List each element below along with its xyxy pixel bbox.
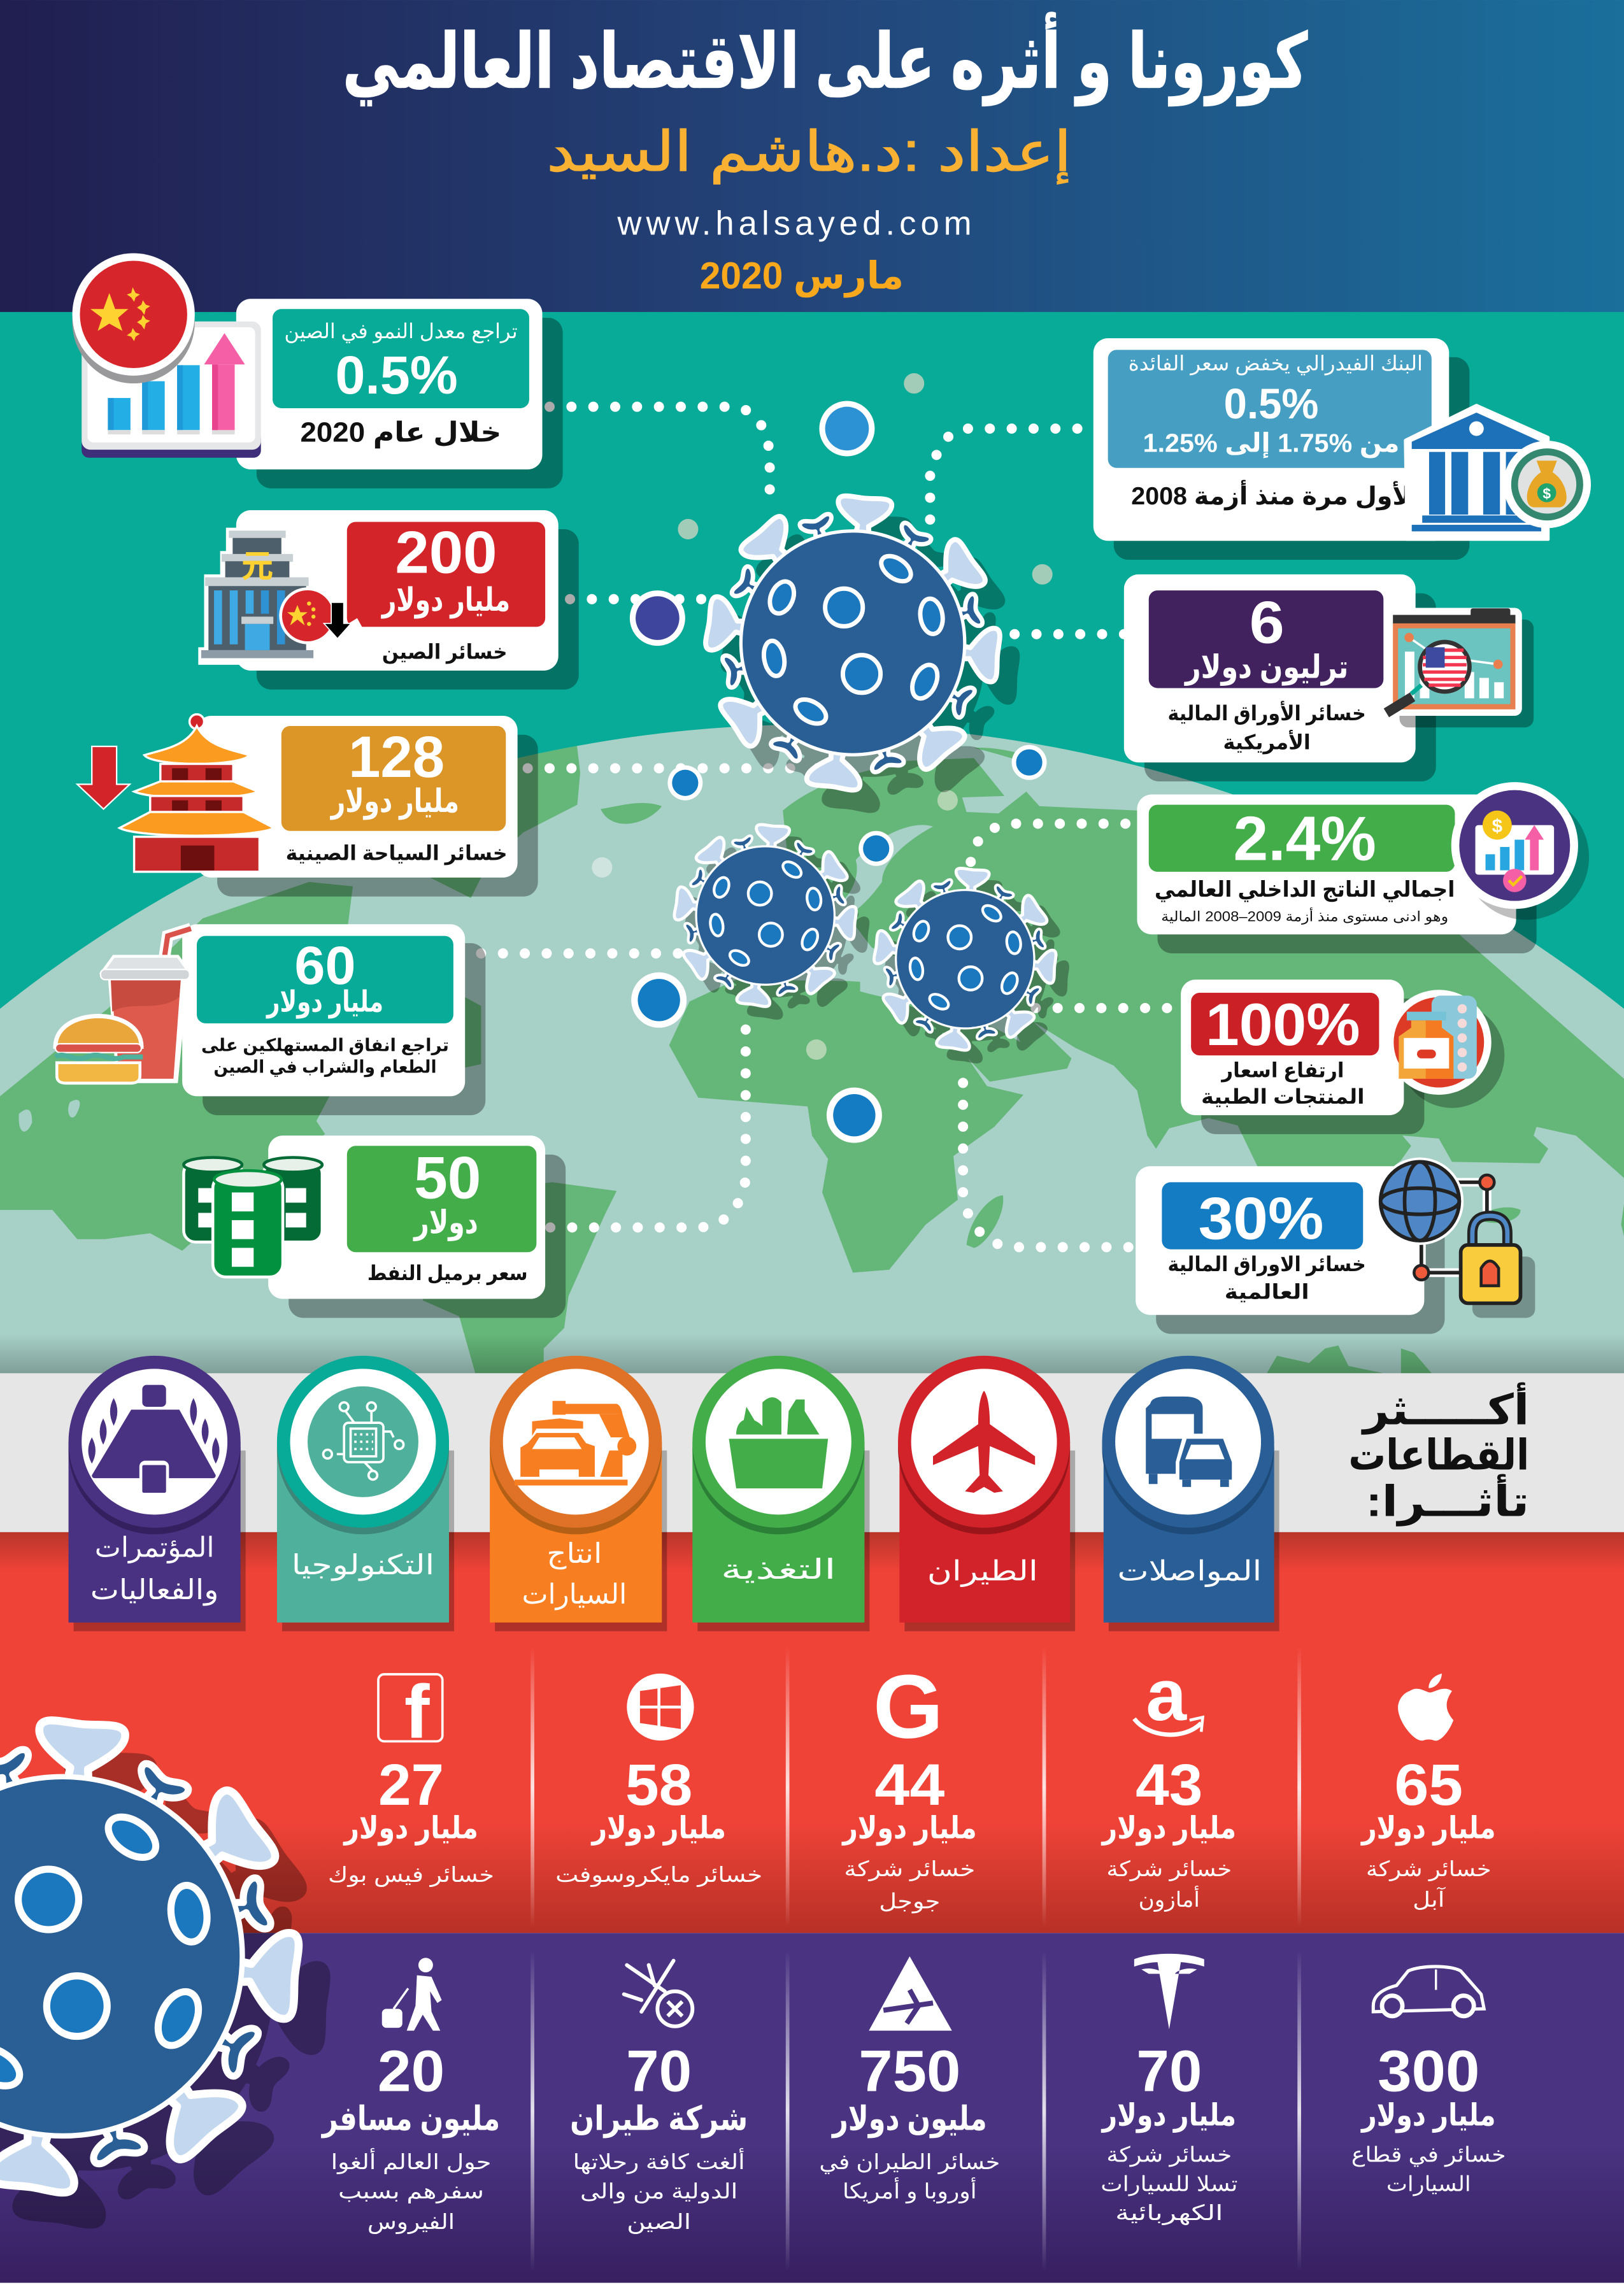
stat: Microsoft: 58 bbox=[625, 1753, 692, 1818]
icon: airplane bbox=[933, 1391, 1035, 1493]
tab: car manufacturing: السيارات bbox=[522, 1579, 627, 1611]
stat: aviation losses: مليون دولار bbox=[831, 2100, 987, 2138]
stat: Amazon: خسائر شركة bbox=[1106, 1858, 1232, 1881]
map node markers bbox=[630, 401, 1047, 1143]
panel: China growth: 0.5% bbox=[335, 345, 458, 405]
icon: analytics with US flag magnifier bbox=[1386, 608, 1534, 727]
panel: food spending 60: 60 bbox=[294, 935, 356, 995]
panel: medical prices 100%: ارتفاع اسعار bbox=[1220, 1059, 1344, 1083]
panel: China growth bbox=[236, 299, 563, 488]
header band bbox=[0, 0, 1624, 313]
panel: China losses 200: خسائر الصين bbox=[382, 641, 508, 664]
stat: Google bbox=[841, 1657, 977, 1913]
tab: aviation bbox=[898, 1356, 1075, 1631]
tab: aviation: الطيران bbox=[927, 1556, 1038, 1587]
panel: global securities 30%: العالمية bbox=[1225, 1281, 1309, 1304]
tab: conferences: المؤتمرات bbox=[95, 1533, 214, 1564]
icon: China chart bbox=[73, 253, 261, 458]
icon: windows bbox=[627, 1674, 694, 1740]
icon: tesla bbox=[1134, 1954, 1204, 2029]
stat: airlines: ألغت كافة رحلاتها bbox=[573, 2148, 745, 2174]
tab: conferences bbox=[69, 1356, 246, 1631]
tab: food: التغذية bbox=[721, 1555, 836, 1585]
icon: car robot bbox=[515, 1401, 636, 1486]
decorative pale dots bbox=[592, 373, 1053, 1060]
stat: airlines: الدولية من والى bbox=[580, 2180, 737, 2204]
stat: Amazon: مليار دولار bbox=[1101, 1811, 1236, 1846]
stat: Microsoft bbox=[555, 1674, 762, 1887]
panel: global GDP 2.4%: اجمالي الناتج الداخلي العالمي bbox=[1155, 878, 1455, 902]
panel: tourism 128: 128 bbox=[348, 725, 445, 790]
panel: oil price 50: سعر برميل النفط bbox=[367, 1262, 528, 1285]
panel: Federal Reserve bbox=[1093, 338, 1469, 560]
column dividers bbox=[531, 1648, 1301, 2271]
icon: apple bbox=[1398, 1674, 1453, 1740]
panel: Federal Reserve: لأول مرة منذ أزمة 2008 bbox=[1131, 480, 1411, 511]
stat: Facebook: 27 bbox=[378, 1753, 444, 1818]
stat: aviation losses: خسائر الطيران في bbox=[819, 2151, 1000, 2174]
panel: global GDP 2.4%: وهو ادنى مستوى منذ أزمة 2009–2008 المالية bbox=[1161, 908, 1448, 925]
tab: car manufacturing bbox=[490, 1356, 667, 1631]
panel: China losses 200: 200 bbox=[395, 519, 497, 586]
icon: facebook: f bbox=[404, 1670, 430, 1755]
icon: globe and lock bbox=[1376, 1158, 1535, 1318]
connector dotted lines bbox=[481, 407, 1167, 1247]
bottom white strip bbox=[0, 2283, 1624, 2285]
panel: oil price 50: دولار bbox=[413, 1204, 478, 1242]
stat: airlines: الصين bbox=[627, 2210, 691, 2235]
stat: Amazon: 43 bbox=[1136, 1753, 1202, 1818]
stat: passengers: الفيروس bbox=[367, 2210, 455, 2234]
panel: China growth: خلال عام 2020 bbox=[301, 418, 501, 448]
panel: China growth: تراجع معدل النمو في الصين bbox=[284, 320, 518, 343]
tab: conferences: والفعاليات bbox=[90, 1575, 218, 1606]
author: إعداد :د.هاشم السيد bbox=[546, 121, 1071, 185]
stat: Tesla: تسلا للسيارات bbox=[1100, 2172, 1237, 2196]
panel: global GDP 2.4%: 2.4% bbox=[1234, 804, 1376, 874]
icon: food basket bbox=[729, 1397, 828, 1488]
stat: Tesla: مليار دولار bbox=[1101, 2098, 1236, 2133]
stat: Facebook: خسائر فيس بوك bbox=[328, 1863, 494, 1887]
stat: Facebook: مليار دولار bbox=[343, 1811, 478, 1846]
panel: oil price 50: 50 bbox=[414, 1144, 481, 1211]
icon: bus and car bbox=[1146, 1397, 1202, 1484]
panel: Federal Reserve: من ‎1.75%‎ إلى ‎1.25%‎ bbox=[1143, 429, 1399, 459]
red losses band bbox=[0, 1532, 1624, 1933]
panel: oil price 50 bbox=[268, 1135, 566, 1318]
stat: Tesla: الكهربائية bbox=[1115, 2202, 1223, 2225]
title: كورونا و أثره على الاقتصاد العالمي bbox=[343, 11, 1308, 106]
stat: passengers: 20 bbox=[378, 2039, 445, 2104]
stat: Google: مليار دولار bbox=[841, 1811, 977, 1846]
stat: aviation losses: أوروبا و أمريكا bbox=[843, 2177, 977, 2203]
icon: bank and money bag bbox=[1406, 405, 1591, 539]
panel: food spending 60: مليار دولار bbox=[266, 986, 383, 1019]
icon: GDP chart circle bbox=[1451, 782, 1589, 920]
date: مارس 2020 bbox=[700, 254, 904, 298]
icon: amazon bbox=[1134, 1655, 1202, 1736]
grey sector band bbox=[0, 1373, 1624, 1532]
stat: Amazon: أمازون bbox=[1139, 1886, 1200, 1912]
stat: Microsoft: مليار دولار bbox=[591, 1811, 726, 1846]
icon: facebook bbox=[378, 1670, 443, 1755]
teal background bbox=[0, 312, 1624, 1376]
icon: traveller bbox=[382, 1958, 442, 2031]
stat: Apple bbox=[1360, 1674, 1496, 1912]
stat: Google: خسائر شركة bbox=[844, 1858, 975, 1881]
panel: tourism 128 bbox=[197, 716, 538, 897]
tab: transport: المواصلات bbox=[1118, 1556, 1262, 1587]
panel: medical prices 100% bbox=[1181, 979, 1424, 1134]
panel: Federal Reserve: 0.5% bbox=[1224, 381, 1318, 428]
stat: airlines bbox=[570, 1961, 748, 2235]
icon: vintage car bbox=[1373, 1967, 1484, 2016]
panel: global GDP 2.4% bbox=[1137, 795, 1537, 953]
panel: China losses 200: مليار دولار bbox=[380, 581, 510, 619]
heading: most affected sectors: تأثـــرا: bbox=[1366, 1474, 1529, 1527]
tab: transport bbox=[1102, 1356, 1279, 1631]
panel: Federal Reserve: البنك الفيدرالي يخفض سعر الفائدة bbox=[1129, 352, 1423, 375]
virus: middle right bbox=[873, 868, 1068, 1063]
stat: Google: جوجل bbox=[879, 1890, 940, 1913]
stat: Facebook bbox=[328, 1670, 494, 1887]
heading: most affected sectors: القطاعات bbox=[1348, 1432, 1529, 1479]
icon: oil barrels bbox=[183, 1158, 322, 1277]
stat: car sector: 300 bbox=[1378, 2039, 1479, 2104]
panel: US securities 6 trillion: خسائر الأوراق المالية bbox=[1168, 701, 1366, 725]
stat: Tesla bbox=[1100, 1954, 1237, 2225]
icon: bank and money bag: $ bbox=[1542, 485, 1551, 502]
panel: medical prices 100%: المنتجات الطبية bbox=[1201, 1085, 1365, 1108]
stat: Apple: خسائر شركة bbox=[1366, 1858, 1492, 1881]
stat: Tesla: خسائر شركة bbox=[1106, 2144, 1232, 2167]
panel: global securities 30%: خسائر الاوراق المالية bbox=[1168, 1253, 1366, 1276]
stat: passengers: حول العالم ألغوا bbox=[331, 2148, 491, 2174]
icon: bank building with yuan bbox=[198, 528, 364, 665]
stat: car sector: مليار دولار bbox=[1360, 2098, 1496, 2133]
tab: technology: التكنولوجيا bbox=[292, 1550, 434, 1581]
globe map bbox=[0, 725, 1624, 1375]
heading: most affected sectors: أكـــــثر bbox=[1361, 1382, 1529, 1435]
panel: food spending 60: تراجع انفاق المستهلكين على bbox=[201, 1035, 449, 1055]
stat: aviation losses: 750 bbox=[858, 2039, 960, 2104]
panel: global securities 30% bbox=[1136, 1166, 1444, 1334]
icon: red arrow down bbox=[77, 746, 130, 809]
stat: airlines: شركة طيران bbox=[570, 2100, 748, 2138]
icon: medicine circle bbox=[1386, 990, 1504, 1108]
icon: drink and burger bbox=[55, 929, 191, 1083]
stat: passengers: مليون مسافر bbox=[320, 2100, 500, 2138]
purple losses band bbox=[0, 1933, 1624, 2283]
virus: bottom left bbox=[0, 1719, 327, 2226]
icon: chip bbox=[323, 1402, 404, 1479]
panel: US securities 6 trillion: الأمريكية bbox=[1223, 730, 1311, 755]
stat: airlines: 70 bbox=[626, 2039, 692, 2104]
panel: global securities 30%: 30% bbox=[1199, 1185, 1323, 1252]
icon: google: G bbox=[873, 1657, 943, 1758]
panel: tourism 128: مليار دولار bbox=[329, 783, 459, 820]
heading: most affected sectors bbox=[1348, 1382, 1529, 1527]
stat: aviation losses bbox=[819, 1956, 1000, 2203]
panel: US securities 6 trillion bbox=[1124, 574, 1436, 781]
panel: US securities 6 trillion: 6 bbox=[1250, 588, 1285, 655]
stat: Apple: مليار دولار bbox=[1360, 1811, 1496, 1846]
icon: plane triangle bbox=[869, 1956, 952, 2031]
stat: Apple: 65 bbox=[1394, 1753, 1463, 1818]
panel: medical prices 100%: 100% bbox=[1206, 991, 1360, 1058]
virus: large top centre bbox=[704, 495, 1018, 811]
icon: bank building with yuan: 元 bbox=[241, 540, 273, 587]
panel: food spending 60: الطعام والشراب في الصين bbox=[213, 1057, 437, 1078]
icon: conference stage bbox=[88, 1385, 220, 1496]
stat: Google: 44 bbox=[874, 1753, 944, 1818]
virus: middle left bbox=[674, 824, 869, 1019]
stat: Tesla: 70 bbox=[1136, 2039, 1202, 2104]
icon: pagoda bbox=[120, 715, 274, 872]
icon: amazon: a bbox=[1146, 1655, 1187, 1736]
stat: passengers: سفرهم بسبب bbox=[338, 2180, 484, 2203]
tab: food bbox=[692, 1356, 869, 1631]
stat: Amazon bbox=[1101, 1655, 1236, 1912]
stat: car sector: خسائر في قطاع bbox=[1351, 2144, 1506, 2167]
panel: US securities 6 trillion: ترليون دولار bbox=[1183, 648, 1348, 686]
panel: China losses 200 bbox=[236, 510, 579, 690]
icon: GDP chart circle: $ bbox=[1492, 816, 1503, 837]
tab: technology bbox=[277, 1356, 454, 1631]
tab: car manufacturing: انتاج bbox=[546, 1539, 602, 1570]
stat: passengers bbox=[320, 1958, 500, 2234]
panel: food spending 60 bbox=[182, 924, 485, 1115]
stat: car sector: السيارات bbox=[1386, 2172, 1471, 2196]
panel: tourism 128: خسائر السياحة الصينية bbox=[286, 842, 508, 865]
icon: plane cancelled bbox=[624, 1961, 692, 2026]
website: www.halsayed.com bbox=[616, 205, 972, 243]
stat: car sector bbox=[1351, 1967, 1506, 2196]
stat: Apple: آبل bbox=[1413, 1886, 1446, 1912]
stat: Microsoft: خسائر مايكروسوفت bbox=[555, 1863, 762, 1887]
